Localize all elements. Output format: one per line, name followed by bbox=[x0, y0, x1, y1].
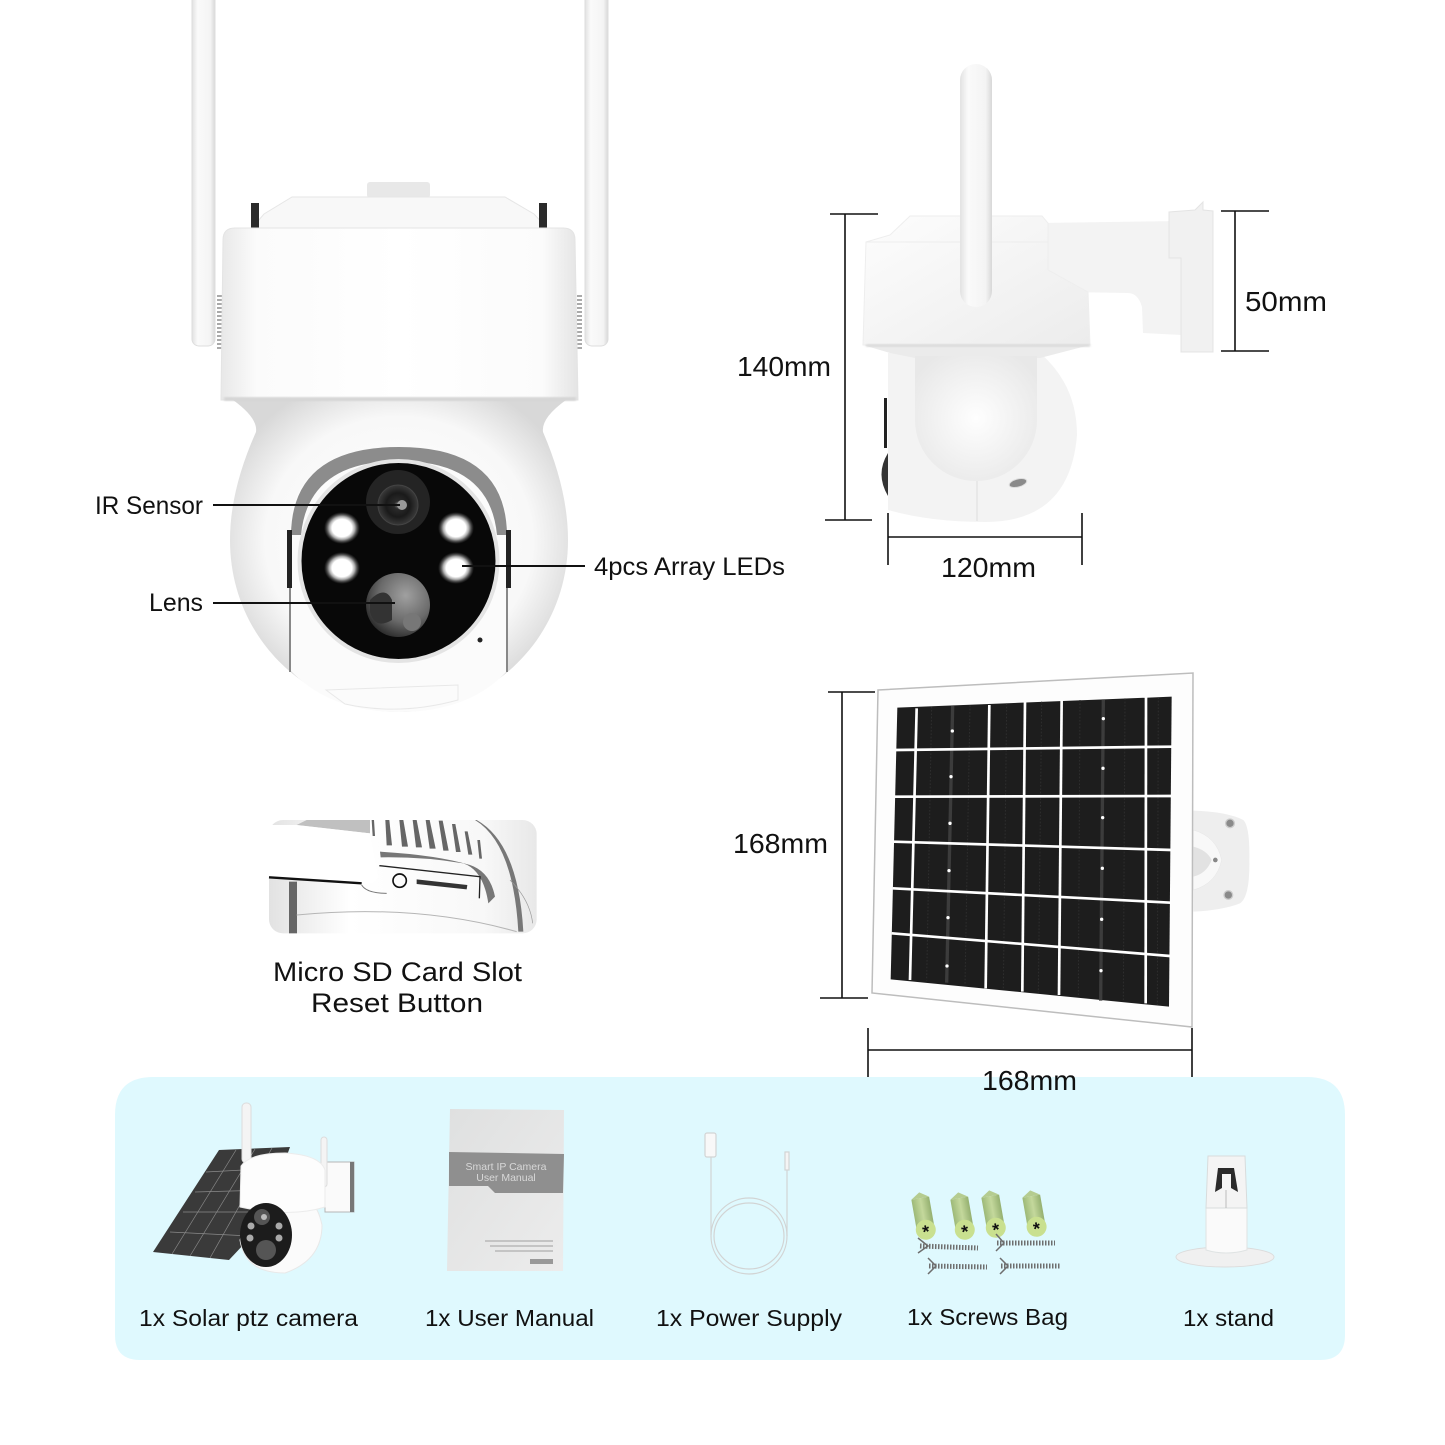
dimension: panel width lines bbox=[868, 1028, 1192, 1080]
dimension: mount 50mm bbox=[1221, 211, 1327, 351]
icon: side slits bbox=[287, 530, 511, 672]
item: power supply bbox=[656, 1133, 843, 1331]
panel background bbox=[115, 1077, 1345, 1360]
icon: hinge tabs bbox=[251, 203, 547, 228]
label: 1x Power Supply bbox=[656, 1305, 843, 1331]
icon: ball head side bbox=[888, 353, 1077, 522]
icon: green wall anchors: * bbox=[991, 1219, 1001, 1240]
label: 1x stand bbox=[1183, 1305, 1274, 1331]
icon: side antenna bbox=[960, 64, 992, 307]
icon: screws bbox=[918, 1234, 1060, 1274]
icon: black lens face bbox=[300, 461, 498, 661]
callout: IR Sensor: IR Sensor bbox=[95, 492, 203, 520]
icon: LEDs bbox=[324, 512, 474, 584]
icon: manual booklet: User Manual bbox=[476, 1172, 536, 1184]
icon: wall plate bbox=[1169, 202, 1213, 352]
icon: mini antennas bbox=[242, 1103, 327, 1187]
icon: SD slot close-up bbox=[269, 820, 537, 933]
icon: stand base bbox=[1176, 1247, 1274, 1267]
text: Reset Button: Reset Button bbox=[311, 988, 483, 1018]
icon: microphone dot bbox=[478, 638, 482, 642]
dimension: height 140mm: 140mm bbox=[737, 351, 831, 382]
icon: housing underside bbox=[863, 345, 1090, 358]
SD card slot detail bbox=[269, 820, 537, 1018]
item: user manual bbox=[425, 1109, 594, 1331]
icon: swivel cover bbox=[915, 356, 1037, 481]
icon: swivel front plate bbox=[290, 448, 508, 712]
icon: main housing bbox=[221, 228, 578, 400]
icon: wall arm bbox=[1040, 221, 1182, 335]
item: screws bag bbox=[907, 1189, 1068, 1330]
callout: Lens: Lens bbox=[149, 589, 203, 617]
icon: mini face bbox=[240, 1203, 292, 1267]
icon: housing side bbox=[863, 216, 1090, 345]
icon: usb cable bbox=[705, 1133, 789, 1274]
text: Micro SD Card Slot: Micro SD Card Slot bbox=[273, 957, 523, 987]
icon: mini camera ball bbox=[240, 1205, 322, 1273]
icon: solar cells bbox=[891, 697, 1172, 1007]
icon: mini housing bbox=[240, 1153, 325, 1212]
icon: top button bbox=[367, 182, 430, 198]
side view camera bbox=[737, 64, 1327, 583]
item: solar ptz camera bbox=[139, 1103, 358, 1331]
icon: strap hole bbox=[1008, 477, 1028, 489]
icon: left antenna bbox=[192, 0, 215, 346]
label: 1x Solar ptz camera bbox=[139, 1305, 358, 1331]
icon: grey visor bbox=[291, 447, 507, 535]
front camera bbox=[95, 0, 785, 712]
icon: ball head bbox=[230, 400, 568, 712]
icon: front lens edge bbox=[882, 398, 888, 496]
solar panel bbox=[733, 673, 1249, 1080]
icon: green wall anchors: * bbox=[1032, 1218, 1042, 1239]
label: panel width 168mm: 168mm bbox=[982, 1065, 1077, 1096]
icon: green wall anchors bbox=[909, 1189, 1049, 1243]
dimension: width 120mm: 120mm bbox=[941, 552, 1036, 583]
item: stand bbox=[1176, 1156, 1274, 1331]
icon: mini solar panel bbox=[153, 1147, 290, 1260]
icon: mini wall mount bbox=[325, 1162, 354, 1212]
icon: solar panel mount bbox=[1193, 811, 1249, 912]
icon: solar panel frame bbox=[872, 673, 1193, 1027]
icon: PIR sensor bbox=[366, 573, 430, 637]
icon: camera lens bbox=[366, 470, 430, 534]
icon: stand head bbox=[1206, 1156, 1247, 1208]
icon: green wall anchors: * bbox=[921, 1221, 931, 1242]
icon: vent fins bbox=[220, 295, 580, 350]
dimension: mount 50mm: 50mm bbox=[1245, 286, 1327, 317]
icon: right antenna bbox=[585, 0, 608, 346]
icon: top cap bbox=[252, 197, 547, 228]
icon: stand column bbox=[1206, 1208, 1247, 1253]
icon: lower engraving bbox=[326, 685, 458, 709]
label: 1x User Manual bbox=[425, 1305, 594, 1331]
icon: manual booklet bbox=[447, 1109, 564, 1271]
icon: seam bbox=[976, 481, 978, 521]
label: 1x Screws Bag bbox=[907, 1304, 1068, 1330]
icon: manual booklet: Smart IP Camera bbox=[466, 1161, 547, 1173]
panel: package contents bbox=[115, 1065, 1345, 1360]
callout: 4pcs Array LEDs: 4pcs Array LEDs bbox=[594, 553, 785, 581]
icon: green wall anchors: * bbox=[960, 1221, 970, 1242]
dimension: panel height 168mm: 168mm bbox=[733, 828, 828, 859]
